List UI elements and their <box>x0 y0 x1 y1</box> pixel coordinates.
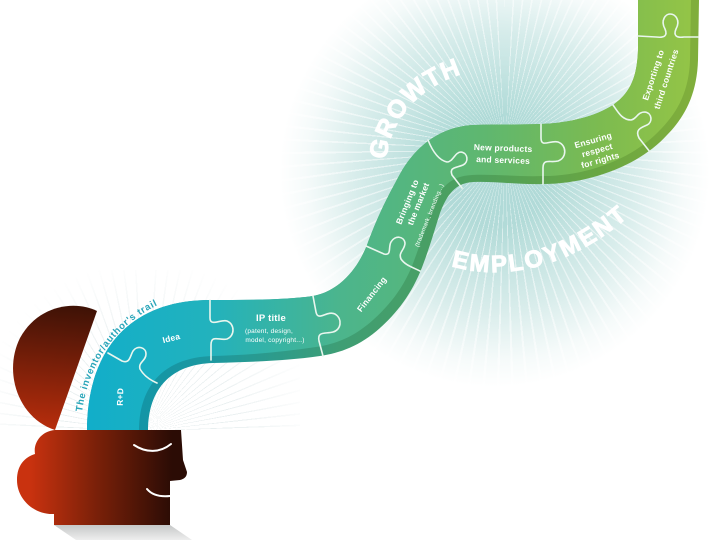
step: exporting: third countries <box>652 48 681 110</box>
step: bringing to the market: the market <box>405 181 431 227</box>
step: ensuring respect for rights: respect <box>581 141 614 159</box>
step: new products and services: New products <box>474 142 533 154</box>
rays around the head <box>0 270 300 431</box>
mouth <box>147 489 170 496</box>
step: ensuring respect for rights: Ensuring <box>573 130 613 150</box>
step: ensuring respect for rights <box>573 130 621 170</box>
step: R+D: R+D <box>115 388 125 406</box>
puzzle joints <box>108 14 698 383</box>
step: financing: Financing <box>355 275 388 314</box>
step: new products and services <box>474 142 533 166</box>
step: bringing to the market: Bringing to <box>394 178 421 226</box>
step: IP title: IP title <box>256 313 286 324</box>
step: IP title <box>245 313 305 344</box>
step: exporting: Exporting to <box>640 49 666 102</box>
step: bringing to the market <box>394 178 445 248</box>
heading: growth: GROWTH <box>370 58 460 158</box>
head <box>17 430 187 525</box>
trail band <box>87 0 699 431</box>
heading: employment: EMPLOYMENT <box>452 204 624 273</box>
step: bringing to the market: (trademark, branding...) <box>415 183 445 248</box>
head shadow <box>54 525 192 540</box>
step: idea: Idea <box>161 331 181 345</box>
trail lower shadow edge <box>87 0 699 431</box>
step: ensuring respect for rights: for rights <box>580 150 621 170</box>
eye <box>134 444 171 451</box>
step: new products and services: and services <box>476 154 530 166</box>
open head cap <box>13 306 97 430</box>
trail title: The inventor/author's trail <box>76 299 157 411</box>
step labels <box>115 48 681 406</box>
step: IP title: (patent, design, <box>245 328 293 335</box>
radial burst behind the trail <box>270 0 720 400</box>
step: IP title: model, copyright...) <box>245 337 305 344</box>
trail main face <box>87 0 691 431</box>
